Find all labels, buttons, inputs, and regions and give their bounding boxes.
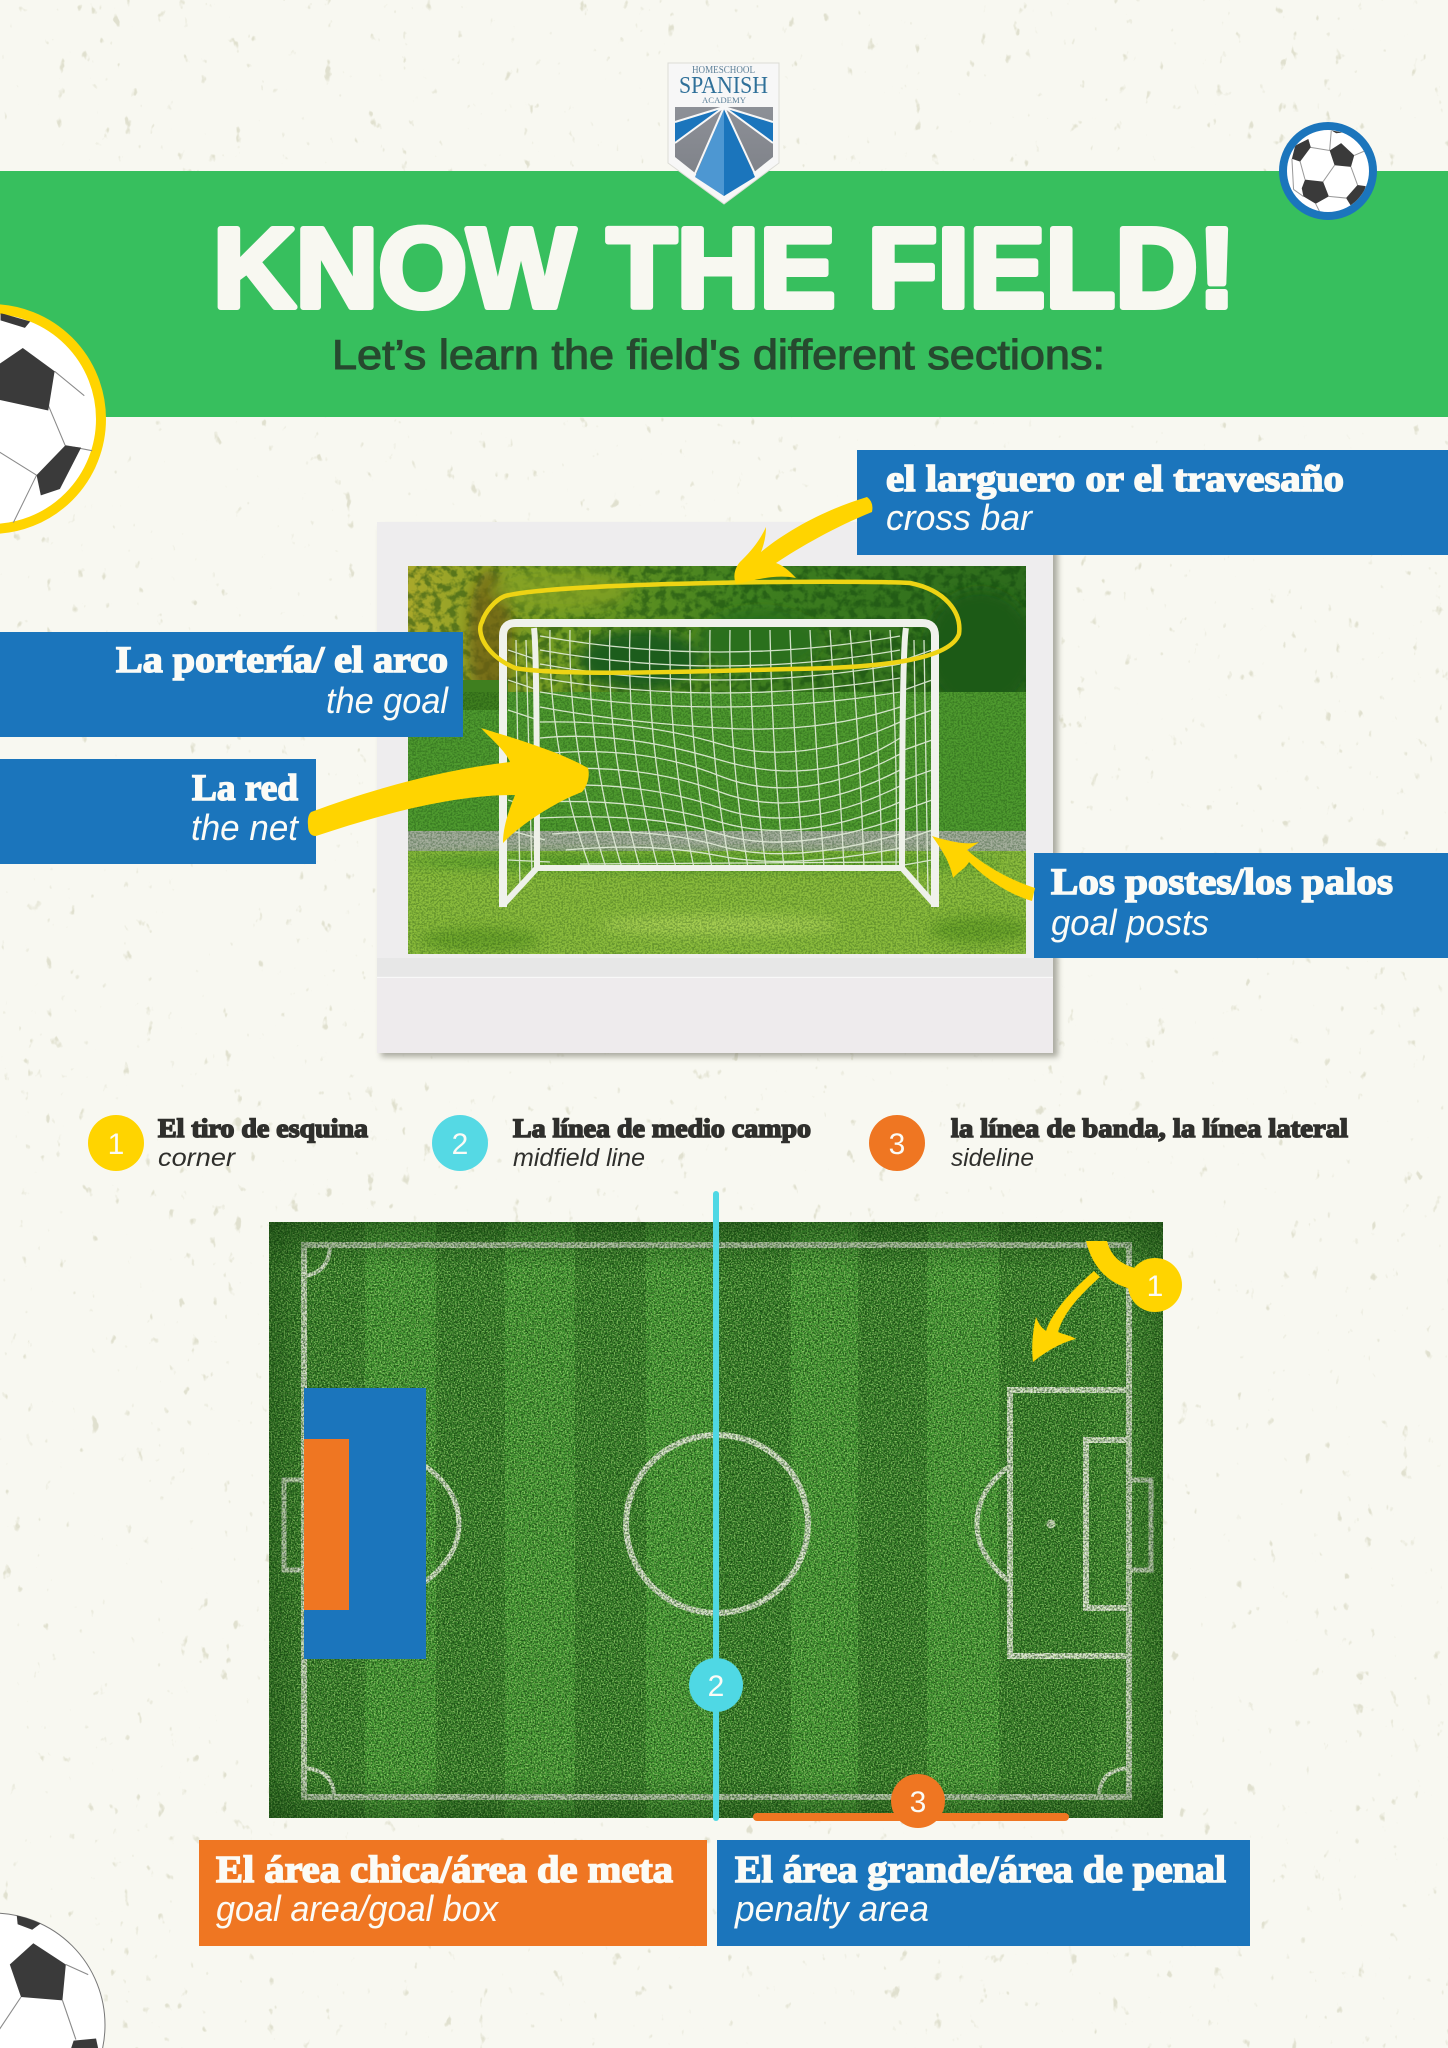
arrow: to net [308,728,589,843]
label: the net [0,759,316,864]
legend: sideline: la línea de banda, la línea lateral [951,1114,1348,1143]
logo: Homeschool Spanish Academy shield: HOMESCHOOL [692,65,755,76]
label: goal area [199,1840,707,1946]
legend: corner [88,1114,368,1172]
label: goal area: El área chica/área de meta [216,1849,673,1891]
grass grain [269,1222,1163,1818]
goal area overlay [304,1439,349,1610]
grass stripes [269,1222,1163,1818]
corner marker with number 1 and arrow: 1 [1147,1270,1163,1303]
arrow: to goal posts [932,836,1035,901]
polaroid photo of the goal [377,522,1058,1057]
legend: midfield line [432,1114,811,1172]
legend: midfield line: 2 [452,1128,468,1161]
label: penalty area [717,1840,1250,1946]
green title band [0,171,1448,417]
arrow: to cross bar [734,497,872,584]
pitch lines [284,1245,1151,1797]
label: cross bar: el larguero or el travesaño [886,459,1344,500]
label: goal posts [1034,853,1448,958]
legend: corner: corner [158,1144,237,1172]
legend: corner: 1 [108,1128,124,1161]
subtitle: Let’s learn the field's different sections: [332,331,1105,378]
photo: goal on grass [400,566,1035,954]
label: cross bar [857,450,1448,555]
label: cross bar: cross bar [886,497,1034,538]
label: penalty area: penalty area [734,1888,929,1929]
logo: Homeschool Spanish Academy shield: ACADEMY [702,95,746,105]
label: the goal [0,632,463,737]
penalty area overlay [304,1388,426,1659]
sideline marker with number 3: 3 [910,1786,926,1819]
soccer field [269,1222,1163,1818]
label: the net: La red [192,768,298,809]
yellow ellipse around cross bar [480,582,959,673]
title: KNOW THE FIELD! [213,205,1236,331]
midfield line marker with number 2: 2 [708,1670,724,1703]
label: goal posts: goal posts [1051,902,1209,943]
icon: soccer ball bottom left [0,1913,105,2048]
icon: soccer ball left with yellow ring [0,309,101,529]
label: penalty area: El área grande/área de penal [735,1849,1226,1891]
logo: Homeschool Spanish Academy shield: SPANISH [679,73,768,99]
logo: Homeschool Spanish Academy shield [668,63,779,204]
legend: corner: El tiro de esquina [158,1114,368,1143]
legend: sideline: 3 [889,1128,905,1161]
label: the goal: the goal [326,680,449,721]
midfield line marker with number 2 [689,1194,743,1818]
legend: sideline: sideline [951,1144,1034,1172]
legend: midfield line: La línea de medio campo [513,1114,811,1143]
corner marker with number 1 and arrow [1032,1241,1182,1362]
label: goal area: goal area/goal box [216,1888,500,1929]
goal frame [503,628,935,905]
label: the net: the net [191,807,300,848]
legend: midfield line: midfield line [513,1144,645,1172]
goal net [508,630,932,895]
legend: sideline [869,1114,1348,1172]
label: goal posts: Los postes/los palos [1051,862,1393,903]
icon: soccer ball top right [1283,126,1373,216]
sideline marker with number 3 [757,1774,1065,1828]
label: the goal: La portería/ el arco [116,640,448,681]
